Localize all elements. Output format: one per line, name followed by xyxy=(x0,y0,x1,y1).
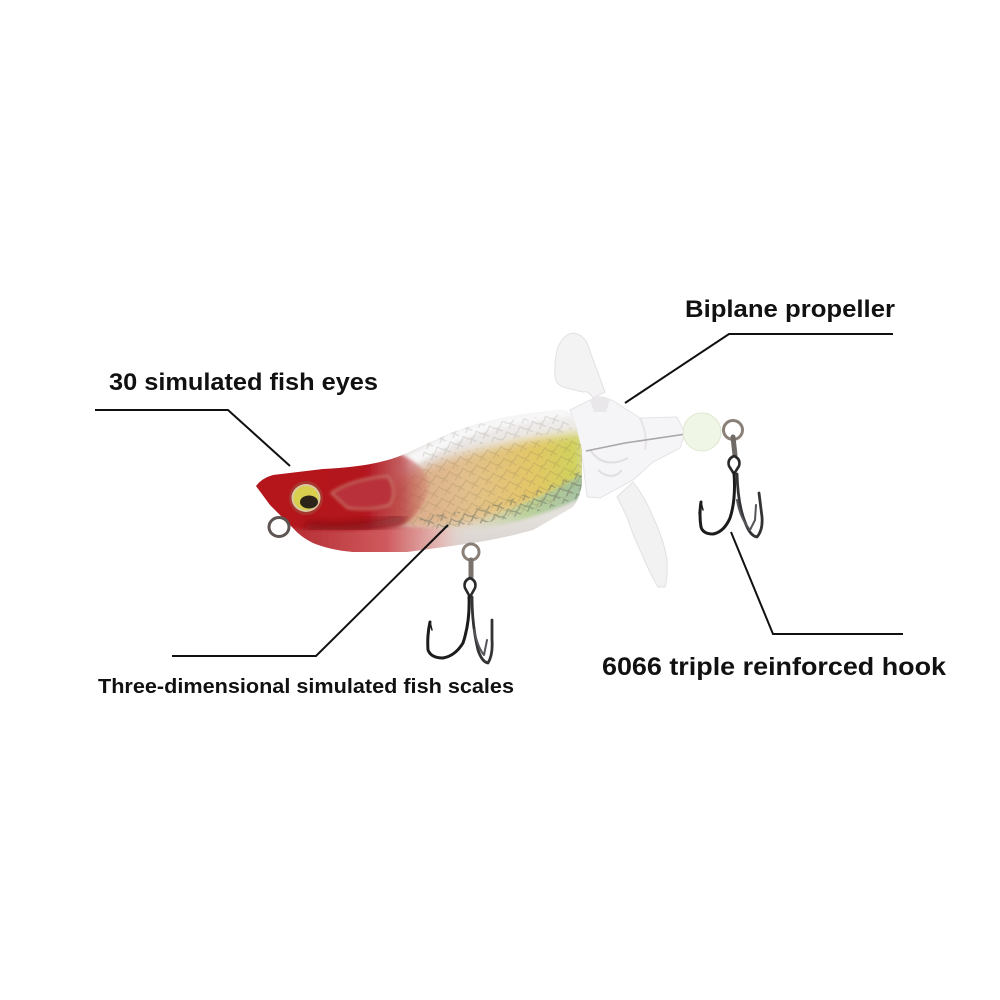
lure illustration xyxy=(250,333,762,663)
lure body xyxy=(250,408,583,560)
callout: fish scales: Three-dimensional simulated fish scales xyxy=(98,676,514,698)
red head xyxy=(256,454,456,552)
propeller upper blade xyxy=(555,333,605,398)
propeller lower blade xyxy=(617,482,667,587)
front line ring xyxy=(269,518,289,536)
rear treble hook xyxy=(699,420,762,537)
glow bead xyxy=(683,413,721,451)
propeller hub and clear tail xyxy=(570,396,686,498)
lower treble hook xyxy=(428,544,492,663)
fish scale colour band xyxy=(375,414,583,530)
callout: hook xyxy=(602,532,946,681)
callout: hook: 6066 triple reinforced hook xyxy=(602,653,946,681)
callout: fish eyes: 30 simulated fish eyes xyxy=(109,369,378,396)
callout: propeller: Biplane propeller xyxy=(685,296,895,323)
callout: fish eyes xyxy=(95,369,378,466)
silver upper edge highlight xyxy=(406,410,568,464)
callout: propeller xyxy=(625,296,895,403)
callout: fish scales xyxy=(98,525,514,698)
fish eye xyxy=(289,481,323,515)
